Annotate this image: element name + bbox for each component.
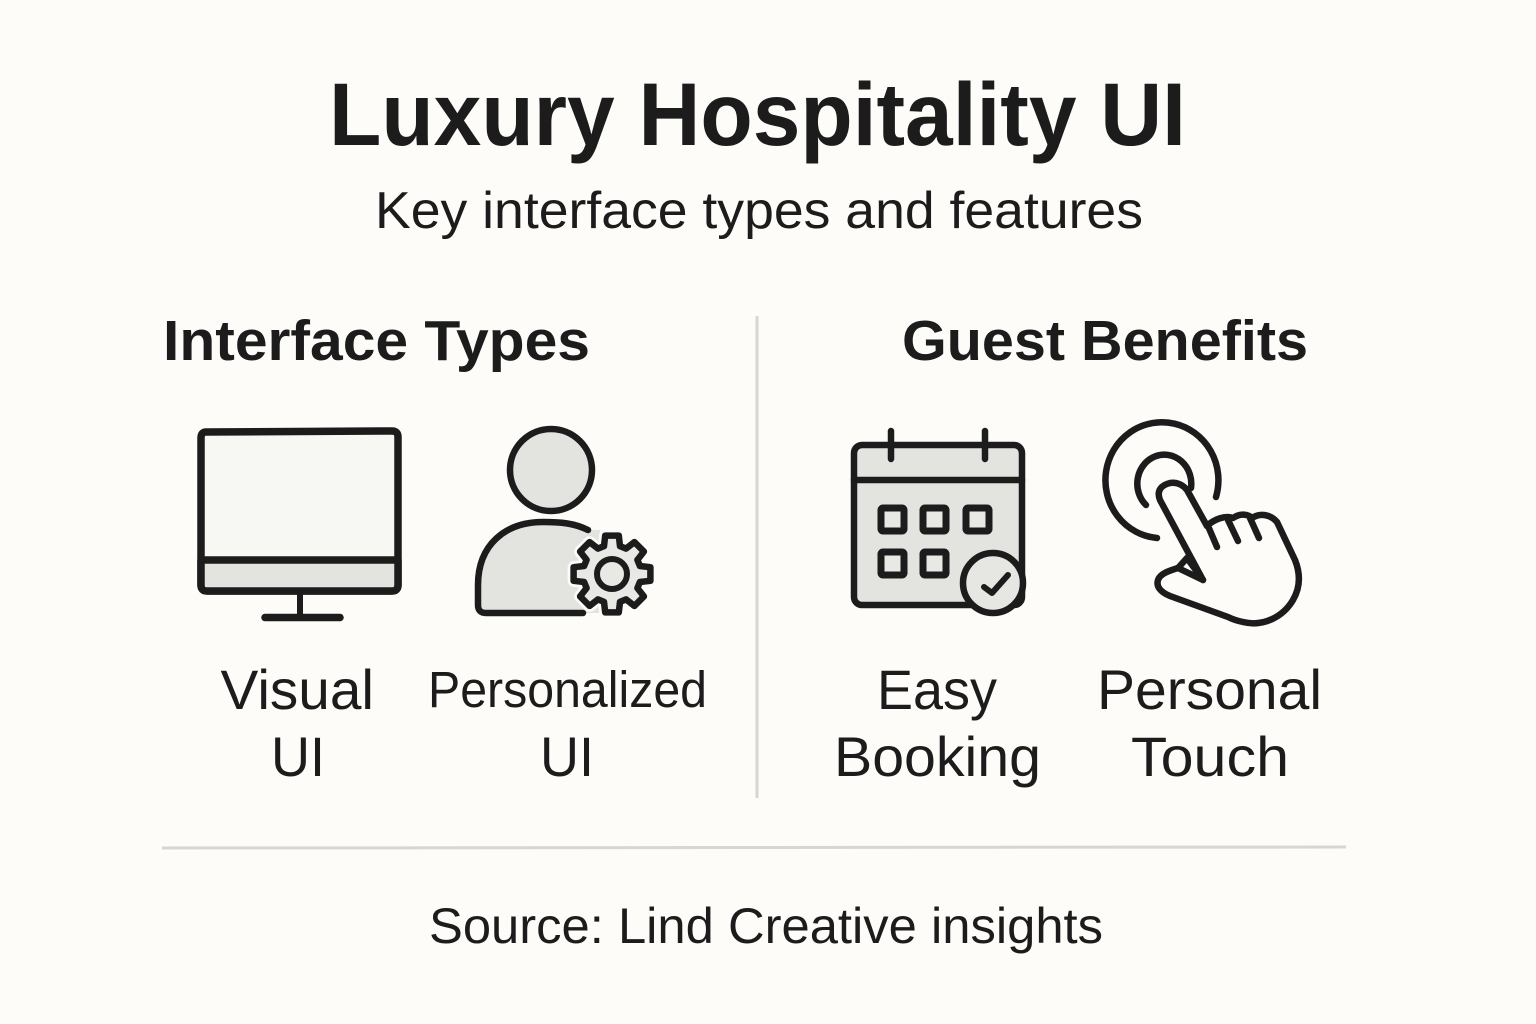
label: visual ui bbox=[220, 658, 374, 788]
label: personalized ui bbox=[428, 661, 707, 788]
label: personal touch bbox=[1097, 658, 1322, 788]
label: easy booking bbox=[834, 658, 1041, 788]
label: easy booking: Booking bbox=[834, 725, 1041, 788]
label: personalized ui: UI bbox=[540, 725, 594, 788]
source note: Source: Lind Creative insights bbox=[429, 898, 1103, 954]
subtitle: Key interface types and features bbox=[375, 182, 1143, 240]
heading: interface types: Interface Types bbox=[163, 309, 590, 373]
label: visual ui: Visual bbox=[220, 658, 374, 721]
label: personalized ui: Personalized bbox=[428, 661, 707, 718]
label: visual ui: UI bbox=[271, 725, 325, 788]
heading: guest benefits: Guest Benefits bbox=[902, 309, 1308, 373]
gear bbox=[574, 536, 650, 612]
label: personal touch: Touch bbox=[1131, 725, 1289, 788]
icon: monitor bbox=[201, 431, 398, 618]
icon: touch hand bbox=[1105, 422, 1299, 623]
icon: user with gear bbox=[478, 429, 650, 613]
label: personal touch: Personal bbox=[1097, 658, 1322, 721]
title: Luxury Hospitality UI bbox=[329, 64, 1186, 164]
icon: calendar with check bbox=[854, 431, 1023, 613]
label: easy booking: Easy bbox=[877, 658, 997, 721]
